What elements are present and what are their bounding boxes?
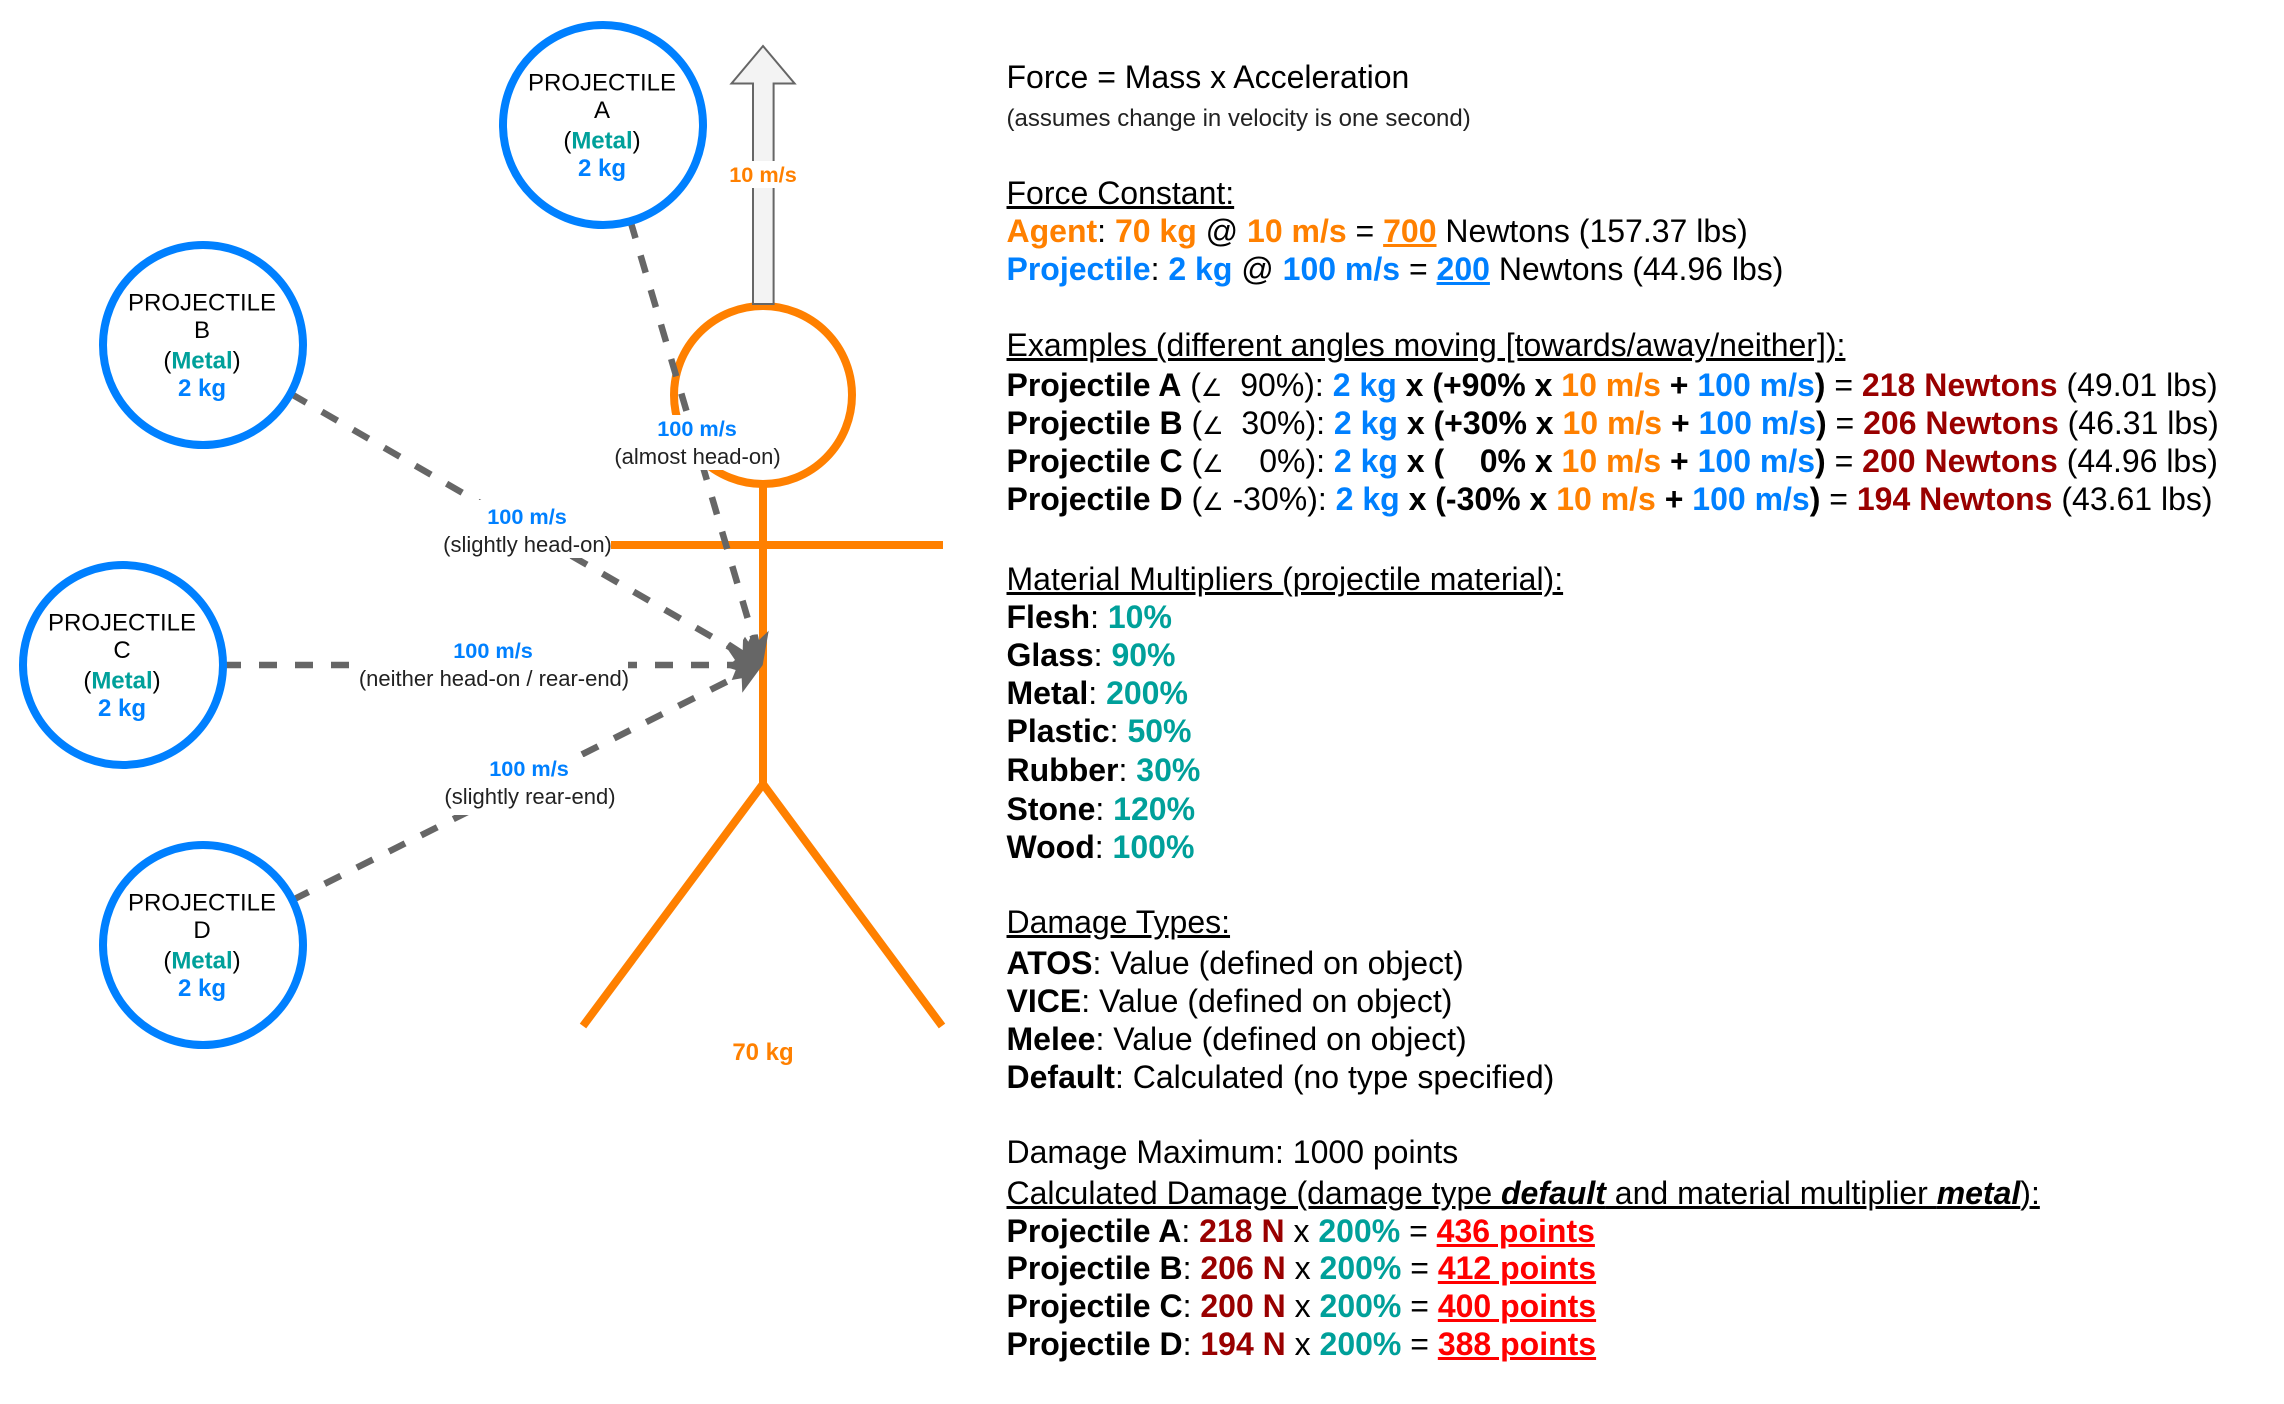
- circle: projectile C: C: [113, 637, 131, 664]
- circle: projectile D: D: [193, 917, 211, 944]
- label: projectile C speed: [355, 638, 629, 696]
- arrow: projectile paths converging on agent: [223, 221, 769, 900]
- label: projectile D speed: [443, 756, 616, 815]
- text block: material multipliers: Metal: 200%: [1006, 675, 1188, 711]
- text block: force constant: Force Constant:: [1006, 175, 1234, 211]
- circle: projectile B: 2 kg: [178, 375, 226, 402]
- circle: projectile A: A: [594, 97, 610, 124]
- circle: projectile B: PROJECTILE: [128, 290, 276, 316]
- circle: projectile A: PROJECTILE: [528, 70, 676, 96]
- circle: projectile D: 2 kg: [178, 975, 226, 1002]
- label: projectile C speed: 100 m/s: [453, 638, 533, 663]
- circle: projectile D: (Metal): [163, 948, 241, 975]
- label: projectile B speed: [443, 500, 612, 558]
- text block: material multipliers: Plastic: 50%: [1006, 713, 1192, 749]
- text block: calculated damage: Calculated Damage (damage type default and material multiplier metal):: [1006, 1175, 2040, 1211]
- text block: angle examples: Projectile D (∠ -30%): 2 kg x (-30% x 10 m/s + 100 m/s) = 194 Newtons (43.61 lbs): [1006, 481, 2213, 517]
- circle: projectile B: (Metal): [163, 348, 241, 375]
- text block: angle examples: Projectile A (∠ 90%): 2 kg x (+90% x 10 m/s + 100 m/s) = 218 Newtons (49.01 lbs): [1006, 367, 2218, 403]
- text block: material multipliers: [1006, 561, 1564, 865]
- label: projectile A speed: (almost head-on): [614, 444, 781, 469]
- circle: projectile A: (Metal): [563, 128, 641, 155]
- text block: angle examples: Projectile B (∠ 30%): 2 kg x (+30% x 10 m/s + 100 m/s) = 206 Newtons (46.31 lbs): [1006, 405, 2219, 441]
- text block: force formula: Force = Mass x Acceleration: [1006, 59, 1409, 95]
- label: projectile A speed: [612, 415, 782, 470]
- text block: calculated damage: Projectile A: 218 N x 200% = 436 points: [1006, 1213, 1595, 1249]
- text block: calculated damage: Damage Maximum: 1000 points: [1006, 1134, 1458, 1170]
- circle: projectile C: PROJECTILE: [48, 610, 196, 636]
- text block: force constant: Projectile: 2 kg @ 100 m/s = 200 Newtons (44.96 lbs): [1006, 251, 1783, 287]
- circle: projectile D: PROJECTILE: [128, 890, 276, 916]
- circle: projectile C: (Metal): [83, 668, 161, 695]
- label: agent speed 10 m/s: 10 m/s: [729, 162, 797, 187]
- circle: projectile C: [23, 565, 223, 765]
- text block: calculated damage: [1006, 1134, 2040, 1362]
- arrow: agent velocity upward: [732, 46, 795, 304]
- label: projectile A speed: 100 m/s: [657, 416, 737, 441]
- label: projectile B speed: (slightly head-on): [443, 532, 612, 557]
- circle: projectile A: [503, 25, 703, 225]
- stick figure agent: [583, 306, 943, 1026]
- text block: damage types: [1006, 904, 1554, 1095]
- label: agent mass 70 kg: 70 kg: [732, 1039, 794, 1066]
- text block: force constant: Agent: 70 kg @ 10 m/s = 700 Newtons (157.37 lbs): [1006, 213, 1748, 249]
- text block: material multipliers: Material Multipliers (projectile material):: [1006, 561, 1563, 597]
- text block: material multipliers: Stone: 120%: [1006, 791, 1195, 827]
- text block: material multipliers: Flesh: 10%: [1006, 599, 1172, 635]
- label: projectile B speed: 100 m/s: [487, 504, 567, 529]
- text block: damage types: ATOS: Value (defined on object): [1006, 945, 1464, 981]
- text block: material multipliers: Wood: 100%: [1006, 829, 1194, 865]
- text block: angle examples: Projectile C (∠ 0%): 2 kg x ( 0% x 10 m/s + 100 m/s) = 200 Newtons (44.96 lbs): [1006, 443, 2218, 479]
- circle: projectile B: B: [194, 317, 210, 344]
- text block: angle examples: Examples (different angles moving [towards/away/neither]):: [1006, 327, 1845, 363]
- label: projectile D speed: (slightly rear-end): [444, 784, 616, 809]
- text block: calculated damage: Projectile D: 194 N x 200% = 388 points: [1006, 1326, 1596, 1362]
- label: projectile D speed: 100 m/s: [489, 756, 569, 781]
- text block: calculated damage: Projectile B: 206 N x 200% = 412 points: [1006, 1250, 1596, 1286]
- text block: force constant: [1006, 175, 1783, 287]
- text block: material multipliers: Glass: 90%: [1006, 637, 1176, 673]
- text block: damage types: Melee: Value (defined on object): [1006, 1021, 1467, 1057]
- text block: material multipliers: Rubber: 30%: [1006, 752, 1200, 788]
- text block: damage types: VICE: Value (defined on object): [1006, 983, 1452, 1019]
- text block: calculated damage: Projectile C: 200 N x 200% = 400 points: [1006, 1288, 1596, 1324]
- label: projectile C speed: (neither head-on / rear-end): [359, 666, 629, 691]
- text block: angle examples: [1006, 327, 2219, 517]
- circle: projectile D: [103, 845, 303, 1045]
- circle: projectile A: 2 kg: [578, 155, 626, 182]
- text block: force formula: (assumes change in velocity is one second): [1006, 105, 1471, 132]
- text block: damage types: Default: Calculated (no type specified): [1006, 1059, 1554, 1095]
- text block: damage types: Damage Types:: [1006, 904, 1230, 940]
- circle: projectile B: [103, 245, 303, 445]
- text block: force formula: [1006, 59, 1471, 132]
- circle: projectile C: 2 kg: [98, 695, 146, 722]
- diagram: stick figure and projectiles: [19, 21, 946, 1066]
